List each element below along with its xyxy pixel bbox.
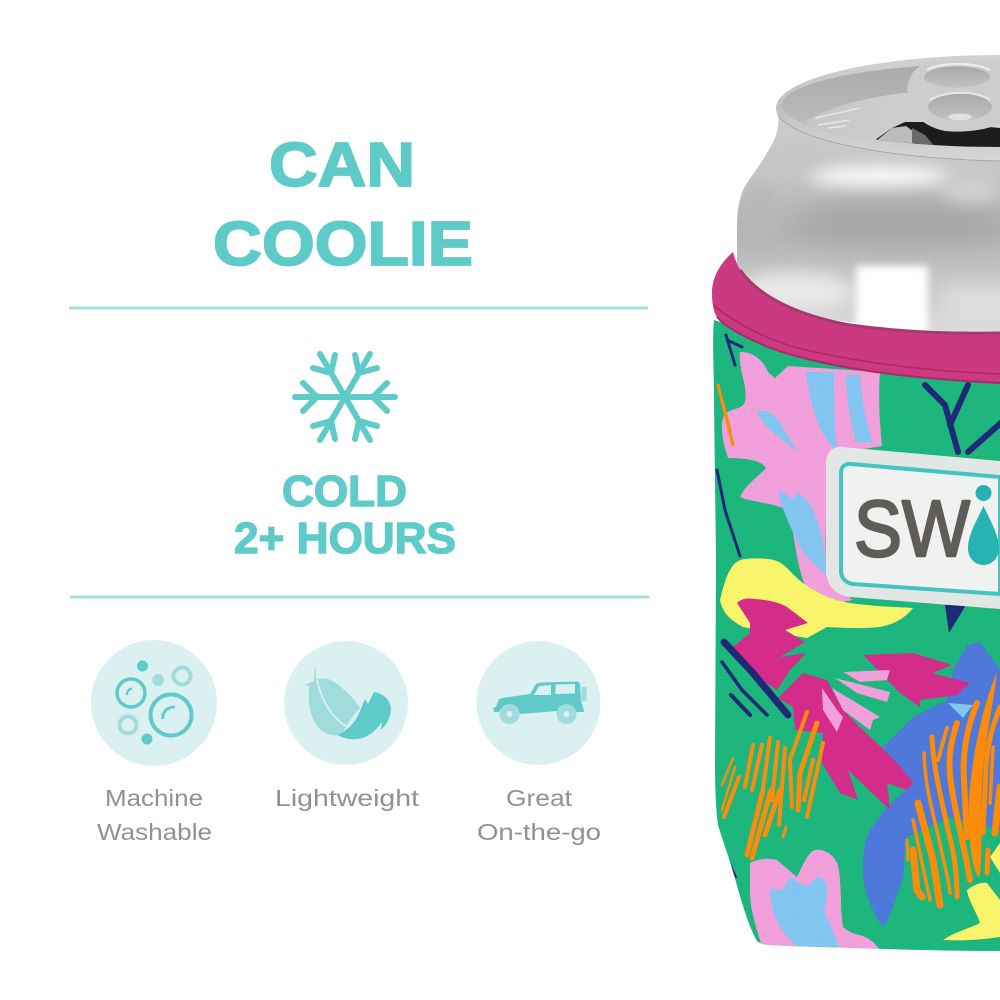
feature: machine washable bbox=[91, 640, 217, 845]
label: machine washable: Washable bbox=[97, 819, 212, 845]
feature: great on-the-go bbox=[476, 641, 601, 845]
logo lettering: SW bbox=[854, 484, 970, 573]
product: patterned coolie sleeve bbox=[700, 252, 1000, 960]
label: lightweight: Lightweight bbox=[275, 785, 420, 811]
navy branches bbox=[717, 335, 1000, 877]
yellow shape bbox=[720, 558, 913, 638]
cold duration text: 2+ HOURS bbox=[234, 514, 456, 563]
can lid bbox=[782, 66, 1000, 147]
pink bottom flower bbox=[750, 850, 880, 950]
divider top bbox=[69, 306, 648, 310]
logo water drop bbox=[968, 485, 999, 565]
feature: lightweight bbox=[275, 641, 420, 811]
pink petals bbox=[822, 670, 890, 732]
icon: feather bbox=[284, 641, 408, 765]
light blue bottom flower bbox=[770, 877, 840, 950]
icon: snowflake bbox=[295, 354, 395, 440]
navy leaf under badge bbox=[945, 605, 966, 633]
yellow bottom right bbox=[943, 843, 1000, 940]
can body bbox=[737, 114, 1000, 332]
fabric print bbox=[700, 310, 1000, 960]
product: aluminium can bbox=[730, 55, 1000, 340]
divider bottom bbox=[70, 596, 649, 598]
magenta flower centre bbox=[778, 673, 913, 810]
light blue stripes bbox=[757, 372, 873, 575]
title: CAN bbox=[269, 131, 415, 200]
icon: bubbles bbox=[91, 640, 217, 766]
cold duration text: COLD bbox=[282, 467, 407, 516]
orange strokes left bbox=[718, 385, 823, 858]
cold duration text bbox=[234, 467, 456, 563]
magenta leaf right bbox=[863, 653, 970, 707]
orange strokes right bbox=[907, 703, 1000, 905]
title bbox=[213, 131, 473, 279]
title: COOLIE bbox=[213, 210, 473, 279]
label: machine washable bbox=[97, 785, 212, 845]
can pull tab bbox=[907, 61, 1000, 132]
can rim bbox=[776, 55, 1000, 161]
sleeve collar bbox=[712, 252, 1000, 383]
label: great on-the-go: On-the-go bbox=[477, 819, 601, 845]
light blue accent bbox=[948, 703, 973, 718]
blue shape bbox=[863, 642, 1000, 927]
pink floral shape bbox=[722, 352, 882, 604]
magenta leaf left bbox=[733, 598, 808, 690]
orange tapered stripe bbox=[969, 672, 997, 878]
label: machine washable: Machine bbox=[105, 785, 203, 811]
icon: jeep bbox=[476, 641, 600, 765]
label: great on-the-go bbox=[477, 785, 601, 845]
logo badge bbox=[826, 447, 1000, 609]
label: great on-the-go: Great bbox=[506, 785, 573, 811]
